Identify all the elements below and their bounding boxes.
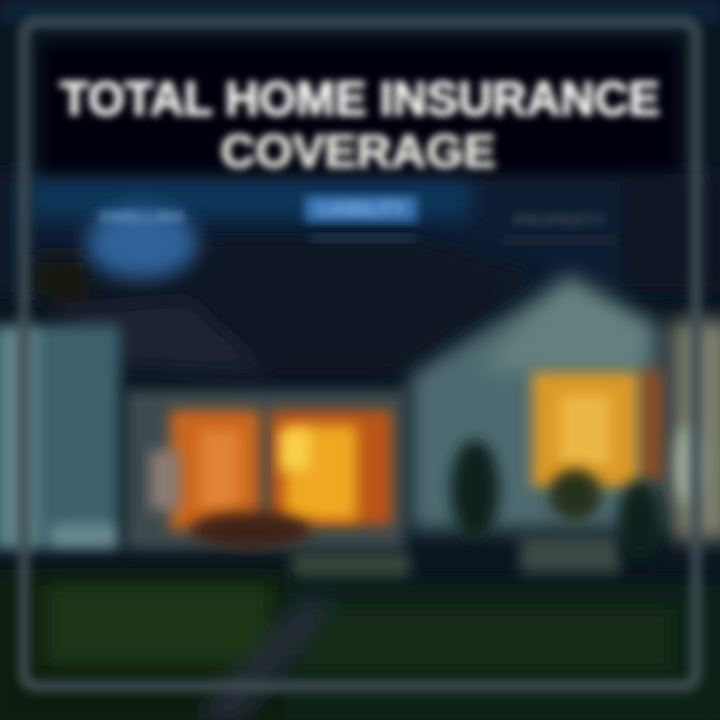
porch steps (290, 535, 620, 580)
title: COVERAGE (220, 125, 496, 177)
lawn (0, 570, 720, 720)
left wall (0, 325, 120, 550)
sky band (0, 172, 720, 292)
title (60, 73, 660, 177)
title: TOTAL HOME INSURANCE (60, 73, 660, 126)
roof (30, 240, 540, 375)
coverage label: center: LIABILITY (319, 199, 405, 219)
coverage label: center (305, 196, 417, 242)
shrubs (190, 425, 702, 560)
coverage badge: left (86, 207, 198, 279)
coverage label: right (505, 211, 615, 244)
right gable wall (410, 275, 720, 540)
center house wall (125, 390, 405, 550)
title panel (42, 44, 678, 177)
coverage label: right: PROPERTY (513, 211, 607, 230)
orange lit windows (150, 410, 392, 530)
coverage badge: left: DWELLING (99, 209, 185, 226)
yellow lit window (532, 370, 662, 487)
